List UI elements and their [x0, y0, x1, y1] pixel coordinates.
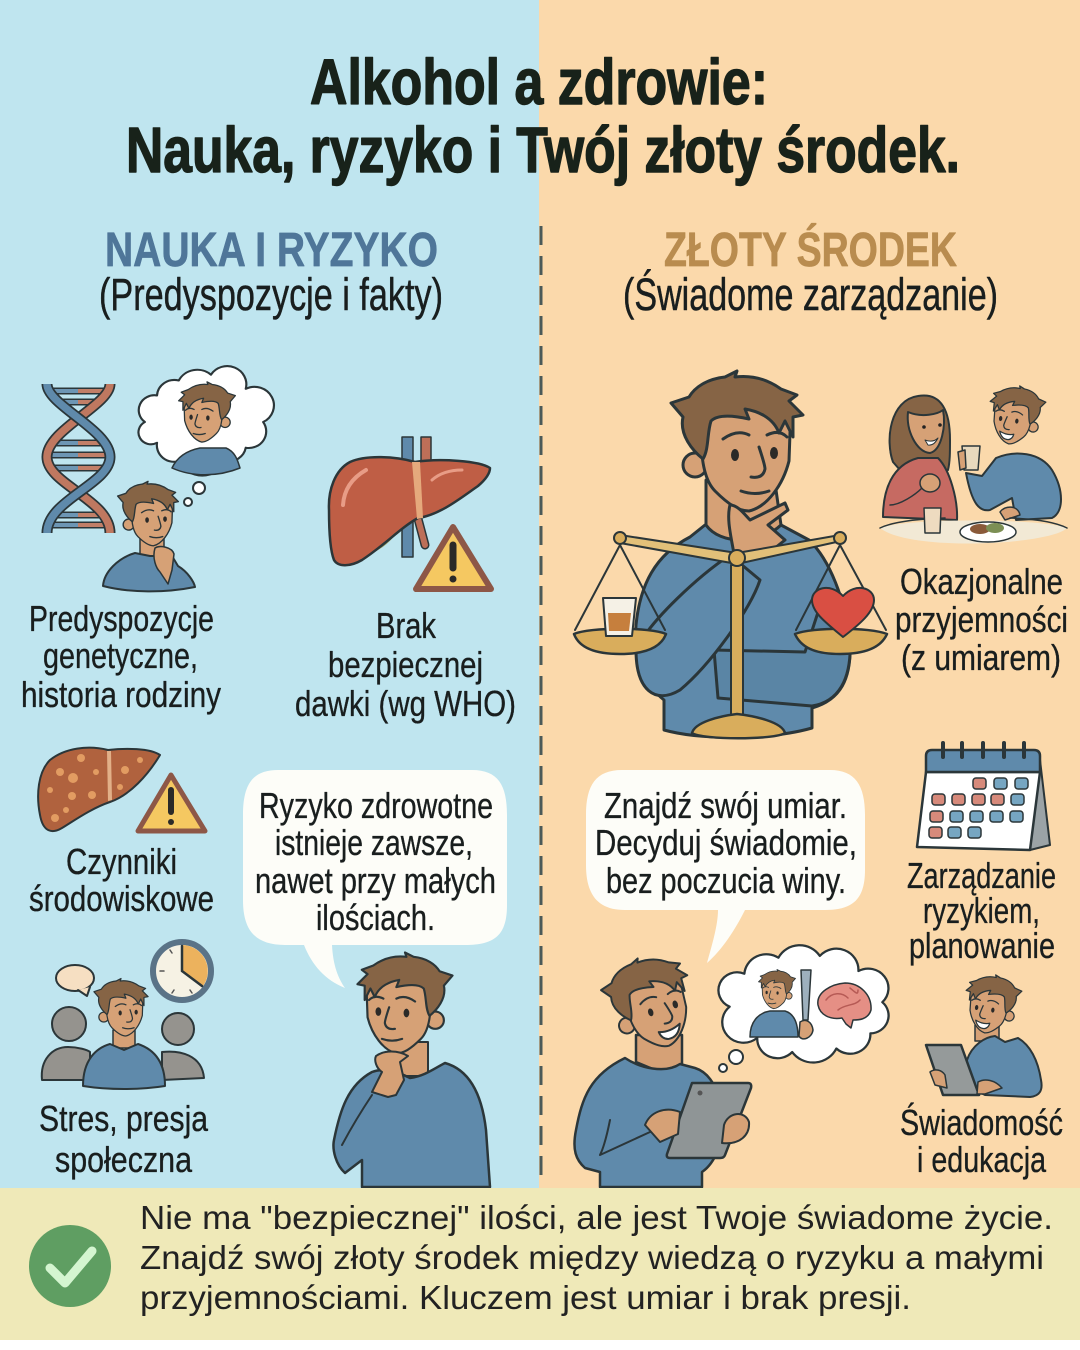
bottom summary band: [0, 1188, 1080, 1340]
speech bubble: ryzyko: istnieje zawsze,: [275, 822, 473, 863]
summary text: [140, 1199, 1053, 1316]
figure: man with scales: [574, 371, 887, 738]
label: okazjonalne przyjemności: [895, 561, 1068, 678]
label: świadomość i edukacja: i edukacja: [917, 1139, 1047, 1180]
heading: nauka i ryzyko: [99, 224, 443, 320]
title: Alkohol a zdrowie:: [310, 46, 768, 118]
label: zarządzanie ryzykiem: ryzykiem,: [923, 890, 1040, 931]
label: brak bezpiecznej dawki: [295, 605, 516, 724]
speech bubble: ryzyko: ilościach.: [316, 897, 435, 938]
title: [126, 46, 960, 186]
icon: green check: [29, 1225, 111, 1307]
icon: thought cloud with self portrait: [138, 366, 274, 506]
label: czynniki środowiskowe: Czynniki: [66, 841, 177, 882]
icon: healthy liver with warning: [329, 437, 491, 589]
speech bubble: ryzyko: nawet przy małych: [255, 860, 496, 901]
label: predyspozycje: genetyczne,: [43, 635, 198, 676]
icon: calendar: [917, 743, 1050, 850]
speech bubble: znajdź swój umiar: Decyduj świadomie,: [595, 822, 857, 863]
icon: thought cloud with brain: [718, 945, 889, 1072]
speech bubble: ryzyko: [243, 770, 507, 988]
figure: man reading tablet small: [926, 972, 1042, 1097]
balance scale: [574, 532, 887, 738]
icon: couple at table: [880, 383, 1067, 543]
label: stres, presja społeczna: Stres, presja: [39, 1098, 209, 1139]
figure: thinking man left: [333, 953, 490, 1187]
label: brak bezpiecznej dawki: bezpiecznej: [328, 644, 483, 685]
hand on chin: [729, 503, 788, 560]
label: stres, presja społeczna: społeczna: [55, 1139, 193, 1180]
label: zarządzanie ryzykiem: [907, 855, 1056, 966]
speech bubble: znajdź swój umiar: bez poczucia winy.: [606, 860, 846, 901]
summary text: Znajdź swój złoty środek między wiedzą o ryzyku a małymi: [140, 1239, 1044, 1276]
heading: złoty środek: [623, 222, 998, 320]
summary text: Nie ma "bezpiecznej" ilości, ale jest Twoje świadome życie.: [140, 1199, 1053, 1236]
label: predyspozycje: [21, 598, 221, 715]
label: predyspozycje: Predyspozycje: [29, 598, 214, 639]
left blue background: [0, 0, 539, 1190]
label: czynniki środowiskowe: środowiskowe: [29, 878, 214, 919]
heading: złoty środek: ZŁOTY ŚRODEK: [664, 222, 957, 277]
label: brak bezpiecznej dawki: dawki (wg WHO): [295, 683, 516, 724]
icon: damaged liver with warning: [38, 748, 205, 831]
right peach background: [539, 0, 1080, 1190]
icon: thinking man small: [103, 481, 195, 591]
heading: nauka i ryzyko: NAUKA I RYZYKO: [105, 224, 438, 277]
heading: nauka i ryzyko: (Predyspozycje i fakty): [99, 269, 443, 320]
speech bubble: znajdź swój umiar: Znajdź swój umiar.: [604, 785, 847, 826]
icon: stress clock speech and people: [42, 942, 211, 1089]
label: stres, presja społeczna: [39, 1098, 209, 1180]
icon: DNA helix: [47, 384, 110, 533]
label: świadomość i edukacja: [900, 1101, 1063, 1180]
label: czynniki środowiskowe: [29, 841, 214, 919]
label: predyspozycje: historia rodziny: [21, 674, 221, 715]
speech bubble: znajdź swój umiar: [586, 770, 865, 963]
summary text: przyjemnościami. Kluczem jest umiar i brak presji.: [140, 1279, 911, 1316]
label: brak bezpiecznej dawki: Brak: [376, 605, 437, 646]
figure: man with tablet: [574, 947, 751, 1187]
speech bubble: ryzyko: Ryzyko zdrowotne: [259, 785, 493, 826]
